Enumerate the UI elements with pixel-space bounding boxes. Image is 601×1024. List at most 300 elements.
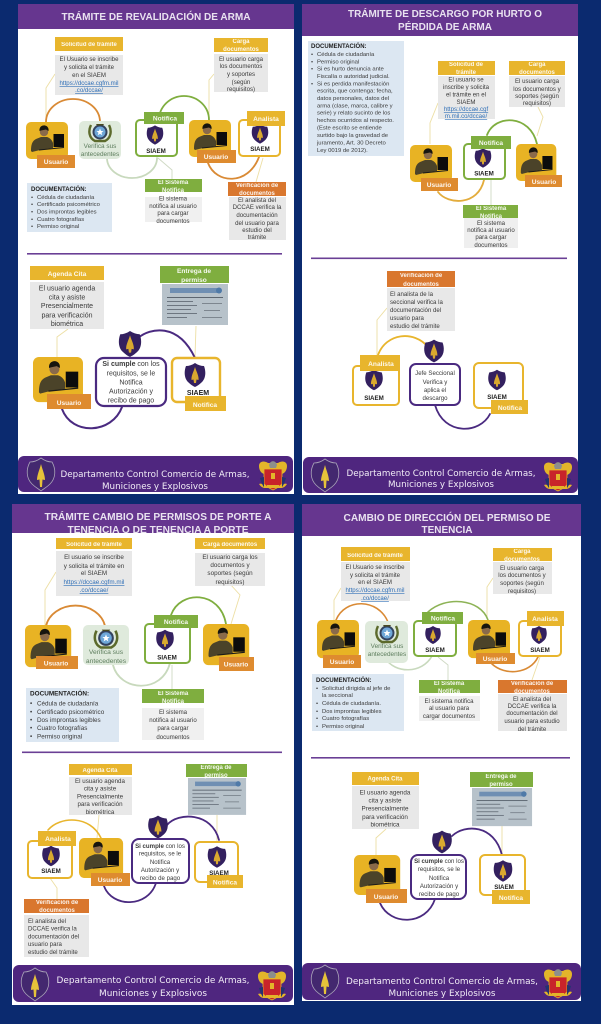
callout: verificación de documentos: El analista de la (390, 291, 434, 298)
callout: el sistema notifica: Notifica (162, 699, 185, 705)
callout: el sistema notifica: El Sistema (158, 691, 189, 697)
documentación: • (31, 195, 33, 201)
callout: carga documentos: soportes (según (207, 570, 253, 577)
SIAEM notifica: Notifica (153, 116, 177, 122)
documentación: • (316, 716, 318, 722)
verifica sus antecedentes (365, 621, 408, 663)
callout: solicitud de trámite: .co/dccae/ (80, 587, 109, 594)
documentación: • (311, 60, 313, 66)
callout: verificación de documentos: estudio del trámite (390, 323, 440, 330)
callout: el sistema notifica: Notifica (480, 214, 503, 220)
documentación: Permiso original (37, 224, 79, 230)
callout: carga documentos: requisitos) (523, 100, 551, 107)
callout: solicitud de trámite: m.mil.co/dccae/ (445, 113, 487, 120)
icon: usuario: Usuario (532, 179, 556, 186)
documentación: • (31, 210, 33, 216)
documentación (312, 674, 404, 731)
SIAEM analista (28, 831, 76, 878)
documentación: Cuatro fotografías (37, 725, 87, 732)
icon: usuario: Usuario (330, 659, 354, 666)
documentación (308, 41, 404, 156)
callout: verificación de documentos: estudio del (242, 227, 272, 234)
flow arcs (46, 597, 226, 686)
SIAEM notifica: Notifica (499, 895, 523, 902)
callout: verificación de documentos: DCCAE verifica la (508, 703, 557, 710)
heading: TRÁMITE DE REVALIDACIÓN DE ARMA (62, 10, 251, 23)
SIAEM notifica: SIAEM (474, 170, 494, 178)
documentación: • (31, 224, 33, 230)
connectors (46, 74, 263, 182)
icon: usuario: Usuario (44, 660, 68, 668)
heading (18, 4, 294, 29)
callout: agenda cita: Presencialmente (41, 303, 93, 310)
callout: verificación de documentos (228, 182, 286, 241)
SIAEM notifica (172, 358, 226, 411)
documentación: Cédula de ciudadanía. (322, 701, 381, 707)
callout: agenda cita: biométrica (370, 822, 400, 828)
SIAEM analista: Analista (253, 116, 279, 123)
heading: TRÁMITE CAMBIO DE PERMISOS DE PORTE A (44, 510, 272, 523)
callout: verificación de documentos: documentos (39, 908, 75, 914)
documentación: surtido bajo la gravedad de (317, 133, 389, 139)
documentación: Dos improntas legibles (37, 717, 101, 724)
callout: el sistema notifica (142, 689, 204, 741)
si cumple: Notifica (429, 875, 450, 882)
SIAEM notifica: Notifica (213, 880, 237, 886)
callout: agenda cita: Agenda Cita (48, 271, 87, 278)
verifica sus antecedentes: antecedentes (368, 651, 406, 658)
si cumple: requisitos, se le (139, 850, 182, 858)
si cumple: Si cumple con los (135, 843, 185, 850)
SIAEM notifica (480, 855, 530, 904)
icon: usuario: Usuario (57, 400, 81, 407)
documentación: Si es perdida manifestación (317, 82, 389, 88)
callout: carga documentos (214, 38, 268, 93)
callout: carga documentos: requisitos) (227, 86, 255, 93)
connectors (430, 103, 543, 205)
SIAEM notifica (136, 112, 184, 156)
callout: verificación de documentos: Verificación de (400, 273, 443, 279)
callout: el sistema notifica (145, 179, 202, 225)
callout: carga documentos: (según (232, 79, 250, 86)
heading: TENENCIA (422, 524, 473, 536)
SIAEM notifica (464, 136, 511, 179)
flow arcs (336, 602, 538, 672)
verifica sus antecedentes: antecedentes (86, 658, 127, 665)
icon: usuario: Usuario (204, 154, 228, 161)
footer: Municiones y Explosivos (388, 479, 494, 490)
SIAEM analista: SIAEM (41, 868, 61, 875)
callout: verificación de documentos (498, 680, 567, 733)
panel: cambio de permisos (12, 504, 294, 1005)
callout: entrega de permiso (160, 266, 229, 325)
callout: solicitud de trámite: https://dccae.cgfm.mil (60, 80, 118, 87)
callout: verificación de documentos: usuario para (28, 941, 62, 948)
callout: carga documentos: Carga (232, 39, 250, 45)
si cumple: Si cumple con los (102, 361, 160, 368)
documentación: • (311, 52, 313, 58)
flow arcs (62, 330, 195, 428)
documentación: Cédula de ciudadanía (317, 52, 375, 58)
heading (302, 504, 581, 536)
footer: Departamento Control Comercio de Armas, (60, 469, 250, 480)
documentación (26, 688, 119, 742)
icon: usuario (25, 625, 78, 669)
callout: solicitud de trámite: SIAEM (457, 99, 475, 106)
callout: solicitud de trámite: El usuario se (448, 76, 484, 84)
SIAEM analista (353, 355, 400, 405)
heading: PÉRDIDA DE ARMA (398, 20, 492, 33)
callout: verificación de documentos: El analista del (28, 918, 66, 925)
documentación: arma (clase, marca, calibre y (317, 104, 393, 110)
SIAEM notifica (195, 842, 243, 888)
SIAEM notifica: SIAEM (487, 394, 507, 401)
callout: carga documentos: El usuario carga (500, 565, 545, 572)
SIAEM notifica: SIAEM (146, 148, 166, 155)
documentación: Solicitud dirigida al jefe de (322, 686, 391, 692)
icon: usuario (79, 838, 130, 886)
flow arcs (438, 120, 537, 201)
heading: TRÁMITE DE DESCARGO POR HURTO O (348, 7, 542, 20)
callout: agenda cita: El usuario agenda (75, 778, 125, 785)
callout: solicitud de trámite: en el SIAEM (72, 72, 106, 79)
callout: el sistema notifica: El sistema notifica (424, 698, 474, 705)
documentación: escrita, que contenga: fecha, (317, 88, 393, 94)
documentación: • (311, 82, 313, 88)
documentación: • (30, 725, 32, 732)
documentación: hechos ocurridos al respecto. (317, 118, 394, 124)
callout: verificación de documentos: del trámite (518, 726, 547, 733)
si cumple (411, 831, 466, 899)
callout: carga documentos: Carga (513, 549, 531, 555)
documentación: • (30, 709, 32, 716)
callout: el sistema notifica: documentos (474, 242, 508, 249)
SIAEM analista: SIAEM (364, 395, 384, 402)
documentación: DOCUMENTACIÓN: (31, 185, 87, 193)
callout: verificación de documentos: documentación del (28, 934, 79, 940)
callout: verificación de documentos: documentación (236, 212, 278, 219)
jefe seccional: Jefe Seccional (415, 370, 455, 377)
callout: solicitud de trámite: en el SIAEM (358, 579, 392, 586)
SIAEM notifica: SIAEM (209, 870, 229, 877)
panel: descargo por hurto (302, 4, 578, 495)
callout: agenda cita: cita y asiste (49, 294, 85, 302)
callout: solicitud de trámite: El Usuario se inscribe (346, 564, 405, 571)
callout: el sistema notifica: Notifica (438, 689, 461, 695)
footer: Municiones y Explosivos (102, 481, 208, 492)
documentación: Permiso original (322, 724, 364, 730)
footer (302, 963, 581, 1000)
icon: usuario: Usuario (98, 877, 122, 884)
callout: solicitud de trámite: .co/dccae/ (75, 87, 103, 94)
documentación: • (31, 202, 33, 208)
callout: solicitud de trámite: Solicitud de (449, 62, 484, 68)
callout: verificación de documentos: usuario para estudio (504, 718, 560, 725)
verifica sus antecedentes (79, 121, 121, 159)
jefe seccional: Verifica y (423, 379, 448, 386)
footer: Departamento Control Comercio de Armas, (346, 976, 538, 987)
callout: entrega de permiso: permiso (489, 782, 513, 788)
documentación: DOCUMENTACIÓN: (311, 42, 367, 50)
documentación: Permiso original (317, 60, 359, 66)
SIAEM notifica (474, 363, 528, 414)
si cumple: recibo de pago (140, 875, 181, 882)
si cumple: Autorización y (420, 883, 459, 890)
icon: usuario (354, 855, 407, 903)
callout: agenda cita (69, 764, 132, 816)
documentación: datos personales, datos del (317, 96, 389, 102)
SIAEM analista: Analista (45, 836, 71, 843)
callout: solicitud de trámite: y solicita el trámite (64, 64, 115, 71)
callout: verificación de documentos: DCCAE verifica la (233, 204, 282, 211)
icon: usuario (516, 144, 562, 187)
documentación: • (316, 701, 318, 707)
callout: carga documentos (195, 538, 265, 586)
icon: usuario: Usuario (374, 894, 398, 901)
jefe seccional: aplica el (424, 387, 446, 394)
footer (18, 456, 293, 492)
callout: solicitud de trámite: el SIAEM (81, 570, 107, 577)
si cumple: Autorización y (109, 388, 153, 396)
SIAEM notifica: SIAEM (187, 390, 209, 397)
footer: Departamento Control Comercio de Armas, (346, 468, 536, 479)
callout: carga documentos: Carga (528, 62, 546, 68)
callout: el sistema notifica: para cargar (157, 725, 189, 732)
icon: usuario (410, 145, 458, 191)
callout: solicitud de trámite (438, 61, 495, 120)
callout: el sistema notifica: notifica al usuario (149, 203, 197, 210)
icon: usuario (317, 620, 361, 668)
callout: el sistema notifica: notifica al usuario (467, 227, 515, 234)
SIAEM analista: Analista (532, 616, 558, 623)
si cumple: recibo de pago (419, 891, 460, 898)
SIAEM notifica: Notifica (479, 140, 503, 147)
documentación: Dos improntas legibles (322, 709, 382, 715)
SIAEM analista: SIAEM (250, 146, 270, 153)
callout: verificación de documentos: Verificación de (511, 681, 554, 687)
callout: solicitud de trámite: trámite (456, 70, 477, 76)
documentación (27, 183, 112, 232)
callout: el sistema notifica: El sistema (159, 196, 188, 202)
footer: Municiones y Explosivos (388, 988, 496, 999)
callout: agenda cita (30, 266, 104, 329)
jefe seccional (410, 340, 460, 405)
SIAEM notifica: SIAEM (494, 884, 514, 891)
callout: verificación de documentos: Verificación de (236, 183, 279, 189)
callout: agenda cita (352, 772, 419, 829)
connectors (334, 578, 540, 680)
callout: entrega de permiso (186, 764, 247, 815)
callout: el sistema notifica: cargar documentos (423, 713, 475, 720)
callout: solicitud de trámite: y solicita el trámite en (64, 563, 125, 570)
callout: solicitud de trámite: El usuario se inscribe (64, 554, 124, 561)
callout: carga documentos: El usuario carga (219, 56, 264, 63)
callout: carga documentos: soportes (según (515, 93, 559, 100)
footer: Departamento Control Comercio de Armas, (56, 975, 250, 986)
callout: verificación de documentos (24, 899, 89, 957)
callout: verificación de documentos: documentos (403, 282, 439, 288)
si cumple: recibo de pago (108, 398, 154, 404)
callout: carga documentos: documentos (504, 557, 540, 563)
documentación: la seccional (322, 693, 353, 699)
callout: el sistema notifica: para cargar (475, 234, 507, 241)
documentación: Si es hurto denuncia ante (317, 66, 385, 72)
si cumple: Autorización y (141, 867, 180, 874)
callout: solicitud de trámite: Solicitud de trámite (347, 553, 403, 559)
callout: agenda cita: para verificación (362, 814, 408, 821)
callout: solicitud de trámite: el trámite en el (446, 92, 486, 98)
icon: usuario (26, 122, 75, 168)
panel: revalidación de arma (18, 4, 294, 494)
callout: solicitud de trámite: .co/dccae/ (361, 595, 389, 602)
callout: solicitud de trámite: https://dccae.cgf (444, 106, 488, 113)
callout: carga documentos: documentos (519, 70, 555, 76)
verifica sus antecedentes: Verifica sus (371, 643, 403, 650)
callout: agenda cita: Presencialmente (77, 794, 124, 800)
callout: solicitud de trámite (55, 37, 123, 95)
documentación: • (311, 66, 313, 72)
SIAEM analista: SIAEM (530, 647, 550, 654)
footer (13, 965, 293, 1002)
callout: carga documentos: los documentos y (513, 86, 562, 93)
flow arcs (48, 817, 219, 902)
callout: solicitud de trámite: inscribe y solicita (443, 84, 490, 91)
callout: solicitud de trámite: https://dccae.cgfm.mil (346, 587, 404, 594)
callout: el sistema notifica: El Sistema (158, 180, 189, 186)
si cumple: Si cumple con los (414, 858, 464, 865)
callout: verificación de documentos (387, 271, 455, 331)
connectors (45, 572, 240, 690)
documentación: Dos improntas legibles (37, 210, 97, 216)
callout: carga documentos: documentos (223, 47, 259, 53)
footer: Municiones y Explosivos (99, 988, 207, 999)
icon: usuario (468, 620, 515, 664)
verifica sus antecedentes: Verifica sus (84, 143, 116, 150)
documentación: Fiscalía o autoridad judicial. (317, 74, 390, 80)
callout: verificación de documentos: El analista del (238, 197, 276, 204)
callout: el sistema notifica (419, 680, 480, 721)
callout: carga documentos: documentos y (210, 562, 250, 569)
callout: entrega de permiso: Entrega de (485, 774, 517, 780)
si cumple: requisitos, se le (418, 866, 461, 873)
icon: usuario: Usuario (224, 662, 248, 668)
documentación: • (316, 686, 318, 692)
SIAEM notifica: Notifica (498, 405, 522, 412)
documentación: • (30, 717, 32, 724)
callout: el sistema notifica: El Sistema (476, 206, 507, 212)
flow arcs (380, 829, 502, 920)
si cumple: Notifica (150, 859, 171, 866)
SIAEM notifica: Notifica (431, 616, 455, 622)
callout: agenda cita: Agenda Cita (367, 776, 403, 782)
icon: usuario (203, 624, 254, 671)
documentación: Cédula de ciudadanía (37, 195, 95, 201)
callout: solicitud de trámite: Solicitud de trámite (61, 42, 117, 48)
icon: usuario: Usuario (483, 656, 507, 663)
documentación: • (316, 709, 318, 715)
documentación: Cédula de ciudadanía (37, 700, 99, 708)
documentación: Certificado psicométrico (37, 709, 105, 716)
callout: verificación de documentos: documentación del (390, 307, 441, 314)
si cumple (132, 816, 189, 883)
callout: solicitud de trámite: https://dccae.cgfm.mil (64, 579, 124, 586)
flow arcs (378, 336, 490, 429)
callout: agenda cita: para verificación (42, 312, 93, 320)
callout: el sistema notifica: notifica al usuario (149, 717, 197, 724)
callout: agenda cita: cita y asiste (369, 798, 402, 804)
documentación: Permiso original (37, 734, 82, 740)
si cumple (96, 331, 166, 406)
callout: el sistema notifica: El sistema (477, 220, 506, 227)
connectors (376, 826, 502, 855)
callout: solicitud de trámite: y solicita el trámite (350, 572, 401, 579)
callout: carga documentos: los documentos y (498, 572, 547, 579)
callout: verificación de documentos: DCCAE verifica la (28, 926, 77, 932)
callout: carga documentos: requisitos) (508, 588, 536, 595)
callout: entrega de permiso: permiso (204, 773, 228, 779)
callout: carga documentos: El usuario carga (515, 78, 560, 85)
documentación: Cuatro fotografías (322, 716, 369, 722)
documentación: Cuatro fotografías (37, 217, 84, 223)
callout: verificación de documentos: documentación del (506, 710, 558, 717)
callout: verificación de documentos: del usuario para (235, 220, 279, 227)
callout: agenda cita: biométrica (51, 321, 83, 328)
heading (12, 504, 294, 536)
SIAEM analista (239, 111, 285, 156)
callout: carga documentos (493, 548, 552, 595)
si cumple: requisitos, se le (107, 370, 155, 378)
callout: verificación de documentos: seccional verifica la (390, 299, 443, 306)
callout: carga documentos: los documentos (220, 63, 262, 70)
callout: solicitud de trámite: El Usuario se inscribe (60, 56, 119, 63)
heading: TENENCIA O DE TENENCIA A PORTE (68, 524, 248, 536)
verifica sus antecedentes: antecedentes (81, 151, 119, 158)
SIAEM notifica: Notifica (164, 619, 188, 626)
callout: solicitud de trámite (56, 538, 132, 596)
callout: agenda cita: cita y asiste (84, 786, 117, 792)
callout: verificación de documentos: documentos (239, 191, 275, 197)
callout: el sistema notifica: para cargar (157, 210, 189, 217)
flow arcs (46, 96, 259, 179)
SIAEM notifica (145, 615, 198, 663)
callout: carga documentos: requisitos) (215, 579, 245, 586)
icon: usuario (33, 357, 91, 409)
documentación: (Este escrito se entiende (317, 126, 383, 132)
SIAEM notifica: Notifica (193, 402, 217, 409)
callout: verificación de documentos: estudio del trámite (28, 949, 78, 956)
icon: usuario (189, 120, 236, 163)
footer (303, 457, 578, 493)
panel: cambio de dirección (302, 504, 581, 1001)
callout: solicitud de trámite: Solicitud de trámite (66, 542, 122, 548)
documentación: Certificado psicométrico (37, 202, 101, 208)
callout: carga documentos: Carga documentos (203, 542, 258, 548)
SIAEM notifica: SIAEM (157, 654, 177, 662)
documentación: DOCUMENTACIÓN: (316, 676, 372, 684)
SIAEM notifica (414, 612, 463, 656)
callout: carga documentos: y soportes (227, 71, 255, 78)
callout: agenda cita: Agenda Cita (82, 768, 118, 774)
callout: agenda cita: Presencialmente (362, 806, 409, 812)
callout: el sistema notifica: documentos (156, 218, 190, 225)
verifica sus antecedentes: Verifica sus (89, 649, 124, 656)
callout: el sistema notifica: documentos (156, 734, 190, 741)
callout: el sistema notifica: al usuario para (429, 705, 470, 712)
documentación: DOCUMENTACIÓN: (30, 688, 89, 698)
callout: carga documentos: soportes (según (500, 580, 544, 587)
documentación: Ley 0019 de 2012). (317, 148, 368, 154)
icon: usuario: Usuario (44, 159, 68, 166)
